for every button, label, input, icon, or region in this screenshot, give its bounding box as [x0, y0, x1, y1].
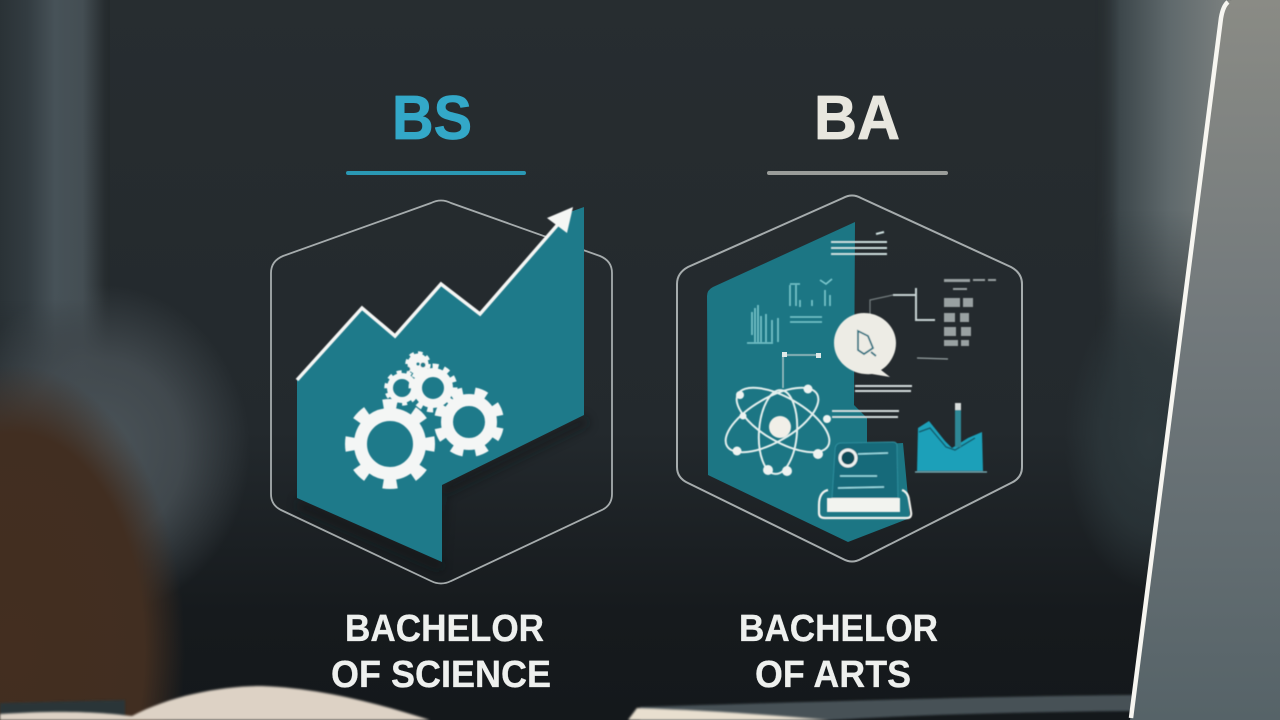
icon: speech bubble with magnifier [834, 313, 896, 377]
label: Bachelor of Science [331, 608, 551, 696]
panel: BA [677, 84, 1022, 696]
open book page, bottom centre [628, 695, 1132, 720]
data table, top right [944, 279, 996, 346]
heading: BS: BS [392, 84, 472, 153]
label: Bachelor of Arts: OF ARTS [755, 654, 911, 696]
underline: BA [767, 171, 948, 175]
trend line arrow [297, 207, 573, 380]
icon: gears [350, 353, 509, 484]
hexagon outline: BS [271, 200, 612, 584]
icon: lab sketches [747, 279, 832, 343]
hexagon outline: BA [677, 196, 1022, 562]
label: Bachelor of Science: OF SCIENCE [331, 654, 551, 696]
document lines, top [831, 232, 887, 254]
teal chart area [297, 207, 584, 562]
connector nodes [782, 352, 821, 358]
heading: BA: BA [814, 84, 900, 153]
laptop, right edge [1130, 0, 1280, 720]
open book page, bottom left [0, 686, 430, 720]
icon: area chart with pencil [915, 403, 987, 472]
connector lines [783, 288, 948, 388]
teal panel [707, 222, 910, 542]
panel: BS [271, 84, 612, 696]
text lines, centre [832, 386, 912, 417]
label: Bachelor of Science: BACHELOR [345, 608, 544, 650]
label: Bachelor of Arts [739, 608, 938, 696]
underline: BS [346, 171, 526, 175]
label: Bachelor of Arts: BACHELOR [739, 608, 938, 650]
chart shadow [297, 415, 590, 572]
icon: document on book [819, 442, 911, 518]
icon: atom [716, 375, 839, 476]
